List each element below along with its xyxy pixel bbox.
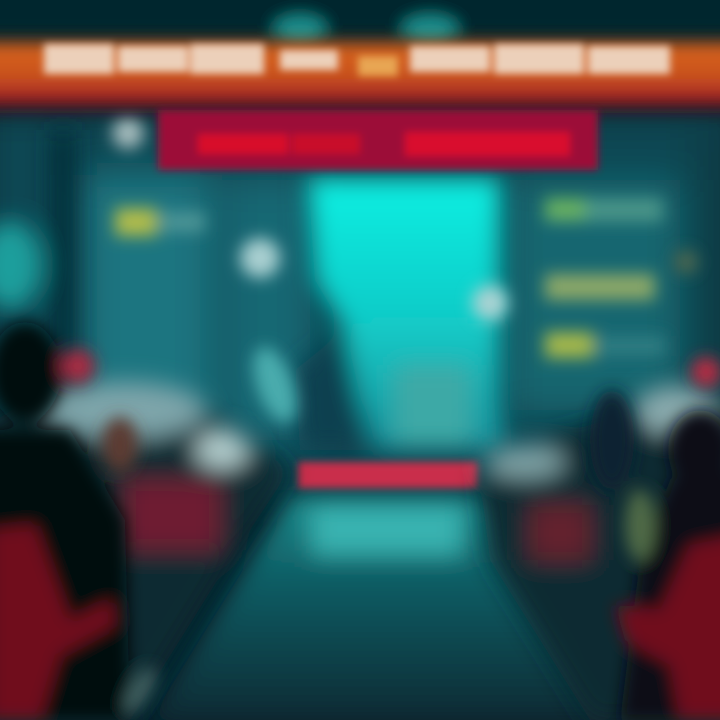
top orange banner — [0, 42, 720, 110]
audience right silhouettes — [590, 357, 720, 720]
top dark strip — [0, 0, 720, 44]
left edge glow — [0, 130, 74, 420]
audience right — [480, 386, 720, 720]
red sub-banner — [158, 110, 598, 170]
back wall — [0, 110, 720, 490]
audience left silhouettes — [0, 322, 162, 720]
central bright screen — [295, 178, 505, 450]
banner title blur — [44, 44, 670, 76]
side panels detail — [112, 117, 698, 429]
lower red banner — [298, 462, 478, 488]
floor aisle — [150, 495, 620, 720]
audience left — [0, 380, 290, 720]
